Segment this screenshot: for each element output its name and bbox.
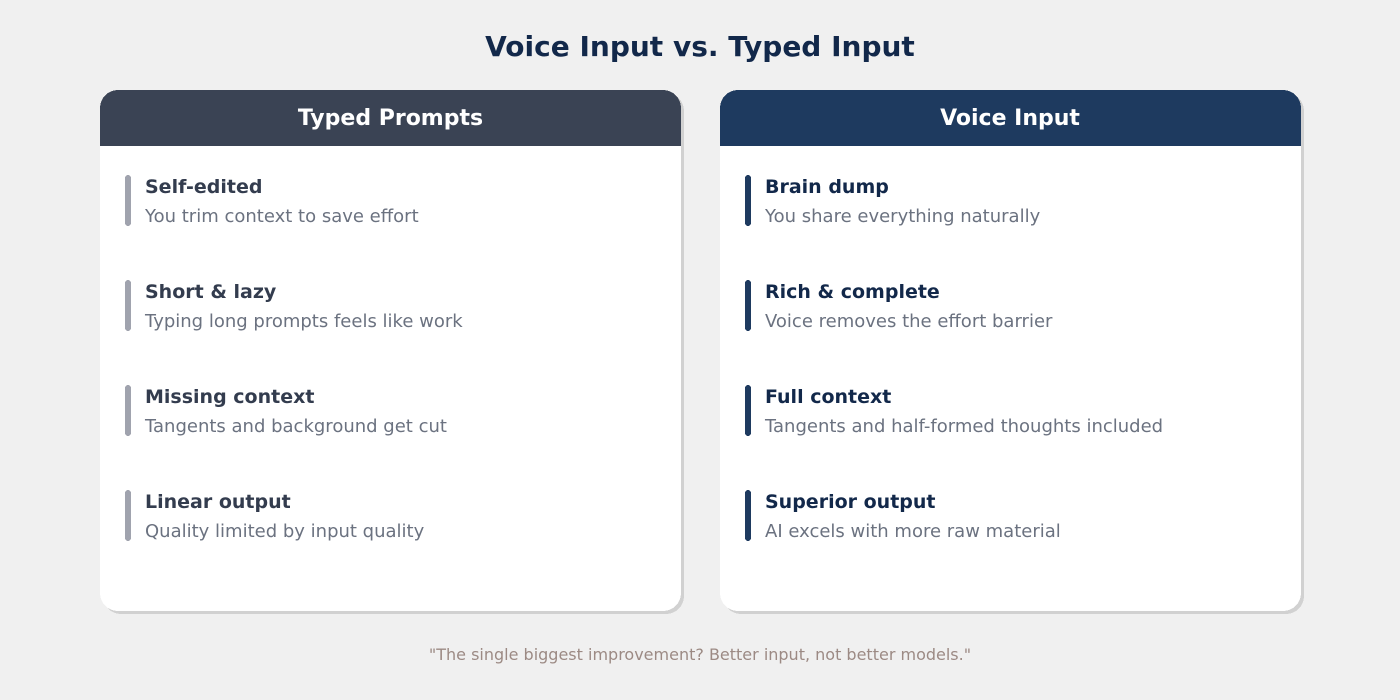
item: self-edited <box>125 175 419 227</box>
item: linear output: Quality limited by input quality <box>145 521 425 542</box>
footer quote: "The single biggest improvement? Better input, not better models." <box>429 645 971 664</box>
item: short and lazy <box>125 280 463 332</box>
item: short and lazy: Short & lazy <box>145 281 277 303</box>
item: rich and complete: Voice removes the effort barrier <box>765 311 1053 332</box>
item: superior output <box>745 490 1061 542</box>
item: superior output: AI excels with more raw material <box>765 521 1061 542</box>
header: voice input <box>720 90 1301 146</box>
panel: typed prompts <box>100 90 684 614</box>
header: voice input: Voice Input <box>940 106 1080 131</box>
header: typed prompts: Typed Prompts <box>298 106 483 131</box>
item: brain dump: Brain dump <box>765 176 889 198</box>
item: full context: Tangents and half-formed thoughts included <box>764 416 1163 437</box>
item: full context: Full context <box>765 386 891 408</box>
title: Voice Input vs. Typed Input <box>485 30 915 63</box>
item: missing context: Missing context <box>145 386 314 408</box>
item: linear output <box>125 490 425 542</box>
item: rich and complete <box>745 280 1053 332</box>
item: self-edited: You trim context to save effort <box>144 206 419 227</box>
item: missing context: Tangents and background get cut <box>144 416 447 437</box>
item: full context <box>745 385 1163 437</box>
item: brain dump <box>745 175 1041 227</box>
header: typed prompts <box>100 90 681 146</box>
item: short and lazy: Typing long prompts feels like work <box>144 311 463 332</box>
item: superior output: Superior output <box>765 491 936 513</box>
item: brain dump: You share everything naturally <box>764 206 1041 227</box>
panel: voice input <box>720 90 1304 614</box>
item: linear output: Linear output <box>145 491 291 513</box>
item: missing context <box>125 385 447 437</box>
item: rich and complete: Rich & complete <box>765 281 940 303</box>
item: self-edited: Self-edited <box>145 176 262 198</box>
